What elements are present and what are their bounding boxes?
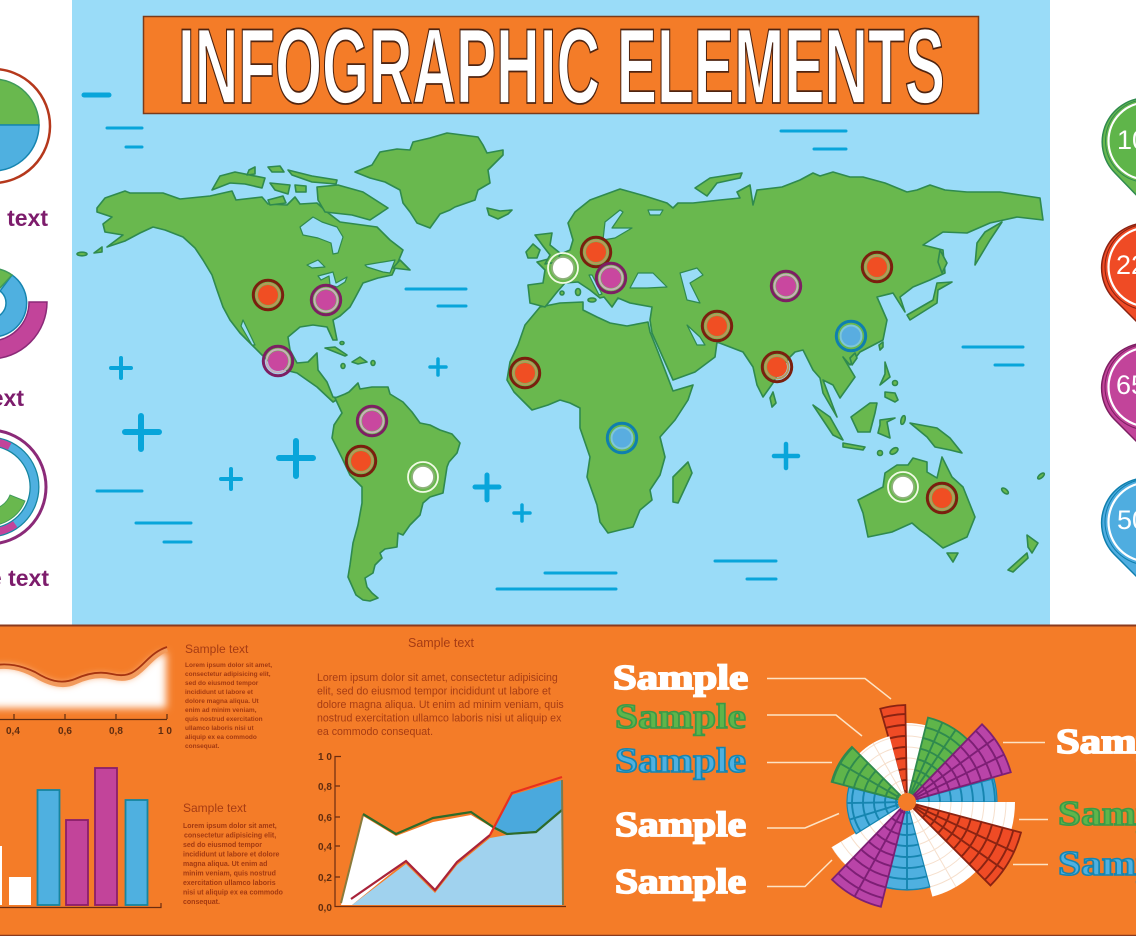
map markers: red (253, 237, 957, 513)
islands: Madagascar and Sri Lanka (673, 342, 883, 503)
segment: white upper left (860, 736, 905, 795)
line chart with soft white area (0, 647, 172, 737)
segment: blue bottom (886, 810, 930, 891)
text block: line chart caption: quis nostrud exercitation (185, 716, 263, 723)
text block: line chart caption: dolore magna aliqua. Ut (185, 698, 260, 705)
islands: Britain and Ireland (526, 233, 560, 264)
segment: magenta lower left (830, 808, 906, 908)
segment: red narrow (879, 704, 908, 794)
text block: line chart caption: sed do eiusmod tempor (185, 680, 259, 687)
text block: line chart caption: Lorem ipsum dolor sit amet, (185, 662, 272, 669)
text block: centre caption: Sample text (408, 636, 475, 650)
sea: inland seas of Eurasia (589, 210, 705, 345)
text block: line chart caption: aliquip ex ea commodo (185, 734, 257, 741)
chart labels: left: Sample (615, 697, 746, 736)
continent: South America (332, 383, 460, 601)
right column: red pin (1102, 223, 1136, 331)
segment: red lower right (912, 803, 1022, 887)
decorative dashes (84, 95, 1023, 589)
right column: green pin (1102, 98, 1136, 205)
segment: green top right (908, 716, 968, 795)
islands: Aleutians and Caribbean (77, 247, 375, 368)
island: Newfoundland (393, 260, 410, 270)
panel: orange bottom band (0, 625, 1136, 936)
area chart: 1 0 (318, 752, 332, 763)
text block: bar chart caption: magna aliqua. Ut enim ad (183, 861, 267, 868)
map markers: magenta (263, 263, 801, 436)
continent: Africa (507, 302, 693, 533)
right column: blue pin (1102, 478, 1136, 586)
text block: bar chart caption: incididunt ut labore et dolore (183, 852, 280, 858)
islands: Mediterranean (560, 288, 596, 302)
chart labels: right (1056, 722, 1136, 883)
continent: North America (97, 191, 403, 402)
segment: green left (830, 746, 902, 801)
line chart with soft white area: 1 0 (158, 726, 172, 737)
right column: magenta pin (1102, 343, 1136, 451)
continent: Australia (858, 457, 975, 548)
chart labels: left: Sample (615, 862, 746, 901)
area chart (318, 752, 566, 914)
area chart: 0,0 (318, 903, 332, 914)
bar chart (0, 768, 161, 908)
islands: South-East Asia (813, 362, 962, 456)
sea: Hudson Bay and Great Lakes (241, 217, 395, 345)
segment: white right (916, 802, 1015, 829)
chart labels: left (613, 658, 748, 901)
panel: world map background (72, 0, 1050, 625)
text block: line chart caption: enim ad minim veniam, (185, 707, 257, 714)
area chart: 0,2 (318, 873, 332, 884)
left column: arc chart (0, 268, 47, 411)
text block: centre caption: ea commodo consequat. (317, 726, 433, 738)
segment: magenta upper right (912, 723, 1012, 800)
text block: bar chart caption: consequat. (183, 899, 220, 906)
chart labels: left: Sample (615, 741, 746, 780)
area chart: 0,8 (318, 782, 332, 793)
area chart: 0,4 (318, 842, 332, 853)
line chart with soft white area: 0,4 (6, 726, 20, 737)
text block: line chart caption (185, 642, 272, 750)
text block: centre caption: elit, sed do eiusmod tempor incididunt ut labore et (317, 686, 551, 698)
text block: bar chart caption: Lorem ipsum dolor sit amet, (183, 823, 277, 830)
islands: Tasmania, New Zealand and Pacific (947, 472, 1045, 572)
text block: centre caption: dolore magna aliqua. Ut enim ad minim veniam, quis (317, 699, 564, 711)
area chart: 0,6 (318, 813, 332, 824)
line chart with soft white area: 0,8 (109, 726, 123, 737)
islands: Arctic Russia, Sakhalin, Kamchatka and Japan (695, 173, 1002, 320)
segment: blue left (846, 787, 900, 835)
text block: line chart caption: consequat. (185, 743, 220, 750)
centre hub (898, 793, 916, 811)
text block: centre caption: nostrud exercitation ullamco laboris nisi ut aliquip ex (317, 712, 562, 724)
text block: line chart caption: ullamco laboris nisi ut (185, 725, 254, 732)
continent: Eurasia (528, 172, 1043, 417)
segment: blue right (916, 778, 998, 802)
leader lines (767, 678, 1048, 886)
text block: centre caption (317, 636, 564, 738)
map markers: white (408, 253, 918, 502)
chart labels: left: Sample (615, 805, 746, 844)
text block: bar chart caption: sed do eiusmod tempor (183, 842, 262, 849)
continent: Arctic islands (212, 166, 388, 220)
segment: white lower left (832, 807, 900, 865)
text block: line chart caption: incididunt ut labore et (185, 689, 254, 696)
radial segmented chart (830, 704, 1022, 908)
text block: line chart caption: consectetur adipisicing elit, (185, 671, 271, 678)
world map (77, 133, 1045, 601)
segment: white lower right (910, 809, 976, 897)
island: Greenland (355, 133, 503, 228)
map markers: blue (607, 321, 866, 453)
text block: bar chart caption: exercitation ullamco laboris (183, 880, 276, 887)
left column: ring chart (0, 430, 49, 591)
text block: bar chart caption: nisi ut aliquip ex ea commodo (183, 890, 283, 896)
decorative plus signs (111, 358, 798, 521)
line chart with soft white area: 0,6 (58, 726, 72, 737)
island: Iceland (487, 208, 512, 219)
left column: pie chart (0, 69, 50, 231)
text block: bar chart caption: Sample text (183, 801, 247, 815)
segment: white top (906, 723, 926, 794)
text block: bar chart caption: minim veniam, quis nostrud (183, 870, 276, 878)
text block: line chart caption: Sample text (185, 642, 249, 656)
chart labels: left: Sample (613, 658, 748, 697)
text block: bar chart caption: consectetur adipisicing elit, (184, 832, 276, 840)
text block: bar chart caption (183, 801, 283, 906)
text block: centre caption: Lorem ipsum dolor sit amet, consectetur adipisicing (317, 672, 558, 684)
